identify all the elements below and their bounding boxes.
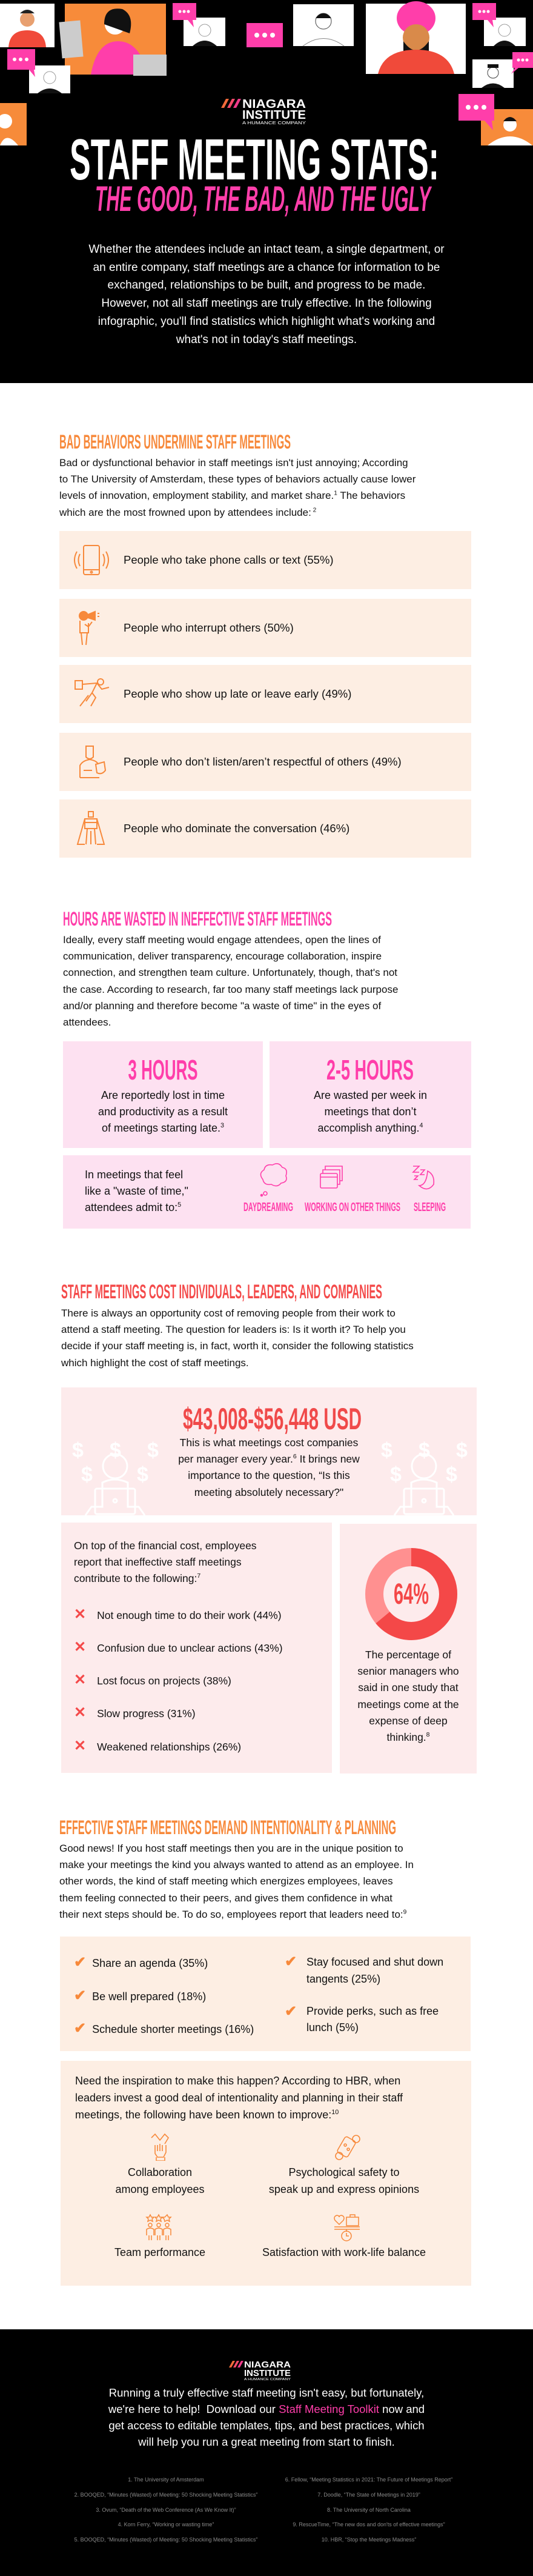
intro paragraph: Whether the attendees include an intact team, a single department, or [88, 243, 445, 256]
behavior: late: People who show up late or leave early (49%) [124, 687, 351, 700]
panel: leader actions checklist: ✔ [285, 1954, 297, 1970]
section 2 paragraph: connection, and strengthen team culture. Unfortunately, though, that's not [63, 967, 397, 978]
panel: improvements [61, 2061, 471, 2286]
panel: cost per manager: meeting absolutely necessary?" [194, 1486, 343, 1498]
call to action [108, 2386, 425, 2448]
call to action: get access to editable templates, tips, and best practices, which [108, 2419, 425, 2432]
references: 10. HBR, “Stop the Meetings Madness” [322, 2537, 416, 2543]
section 3 paragraph: attend a staff meeting. The question for leaders is: Is it worth it? To help you [61, 1324, 406, 1335]
section 2 paragraph [63, 934, 398, 1028]
stat: 2-5 hours: Are wasted per week in [314, 1089, 427, 1101]
stat: 2-5 hours: accomplish anything.4 [317, 1122, 423, 1134]
panel: 64% donut: 64% [394, 1578, 429, 1610]
section 4 paragraph: Good news! If you host staff meetings then you are in the unique position to [59, 1843, 403, 1854]
intro paragraph: infographic, you'll find statistics which highlight what's working and [98, 315, 435, 328]
stat: 3 hours: of meetings starting late.3 [102, 1122, 224, 1134]
icon: psychological safety [335, 2135, 360, 2160]
behavior: phone [59, 531, 471, 589]
panel: 64% donut: expense of deep [369, 1715, 448, 1727]
call to action: we're here to help! Download our Staff Meeting Toolkit now and [108, 2403, 425, 2415]
panel: cost per manager: per manager every year.6 It brings new [178, 1453, 360, 1465]
footer [0, 2329, 533, 2576]
section 1 paragraph: which are the most frowned upon by attendees include: 2 [59, 507, 316, 518]
references: 7. Doodle, “The State of Meetings in 2019” [317, 2492, 420, 2498]
section 3 paragraph: which highlight the cost of staff meetings. [61, 1357, 249, 1369]
panel: waste of time activities: attendees admit to:5 [85, 1201, 181, 1213]
panel: leader actions checklist: tangents (25%) [306, 1973, 380, 1985]
references: 4. Korn Ferry, “Working or wasting time” [118, 2521, 214, 2528]
list with x icons: ✕ Slow progress (31%) [74, 1704, 196, 1721]
panel: improvements: Psychological safety to [288, 2166, 400, 2178]
references: 8. The University of North Carolina [327, 2507, 411, 2513]
header background [0, 0, 533, 383]
list with x icons: ✕ Lost focus on projects (38%) [74, 1672, 231, 1688]
logo: Niagara Institute: INSTITUTE [242, 108, 306, 122]
panel: 64% donut: thinking.8 [386, 1731, 430, 1743]
panel: leader actions checklist: Provide perks, such as free [306, 2005, 439, 2017]
footer logo: INSTITUTE [244, 2368, 291, 2378]
panel: ineffective meeting effects: contribute to the following:7 [74, 1572, 200, 1584]
panel: improvements: Need the inspiration to make this happen? According to HBR, when [75, 2075, 400, 2087]
intro paragraph: exchanged, relationships to be built, and progress to be made. [108, 279, 425, 292]
behavior: interrupt: People who interrupt others (50%) [124, 621, 294, 634]
section 1 paragraph: to The University of Amsterdam, these types of behaviors actually cause lower [59, 473, 415, 485]
section 2 paragraph: and/or planning and therefore become "a waste of time" in the eyes of [63, 1000, 381, 1012]
behavior: not listening: People who don’t listen/aren’t respectful of others (49%) [124, 755, 402, 768]
section 2 paragraph: attendees. [63, 1016, 111, 1028]
decorative icons: people with laptops and dollar signs: $ [381, 1439, 392, 1462]
icon: collaboration [151, 2134, 169, 2161]
decorative icons: people with laptops and dollar signs: $ [147, 1439, 159, 1462]
behavior: phone: People who take phone calls or text (55%) [124, 553, 334, 566]
stat: 2-5 hours: meetings that don’t [324, 1106, 417, 1118]
section 1 paragraph [59, 457, 415, 518]
panel: 64% donut: The percentage of [365, 1649, 451, 1661]
intro paragraph: an entire company, staff meetings are a chance for information to be [93, 261, 440, 274]
logo: Niagara Institute: NIAGARA [242, 98, 306, 111]
call to action: Running a truly effective staff meeting isn't easy, but fortunately, [109, 2386, 424, 2399]
list with x icons: ✕ Weakened relationships (26%) [74, 1738, 241, 1754]
intro paragraph [88, 243, 445, 346]
call to action: will help you run a great meeting from start to finish. [138, 2435, 395, 2448]
panel: leader actions checklist: ✔ [285, 2003, 297, 2020]
section 3 paragraph: decide if your staff meeting is, in fact, worth it, consider the following statistics [61, 1340, 414, 1352]
section 1 paragraph: Bad or dysfunctional behavior in staff meetings isn't just annoying; According [59, 457, 408, 469]
intro paragraph: However, not all staff meetings are truly effective. In the following [101, 297, 432, 310]
references: 5. BOOQED, “Minutes (Wasted) of Meeting: 50 Shocking Meeting Statistics” [74, 2537, 257, 2543]
panel: leader actions checklist: lunch (5%) [306, 2021, 359, 2034]
behavior: dominate: People who dominate the conversation (46%) [124, 822, 349, 835]
section 4 paragraph: make your meetings the kind you always wanted to attend as an employee. In [59, 1859, 414, 1870]
behavior: late [59, 665, 471, 723]
panel: improvements: leaders invest a good deal of intentionality and planning in their staff [75, 2092, 403, 2104]
panel: improvements: Team performance [114, 2246, 205, 2258]
panel: cost per manager [61, 1387, 477, 1515]
section 4 paragraph: them feeling connected to their peers, and gives them confidence in what [59, 1892, 392, 1904]
decorative icons: people with laptops and dollar signs: $ [446, 1463, 457, 1486]
footer logo: A HUMANCE COMPANY [244, 2378, 291, 2381]
panel: waste of time activities [63, 1155, 471, 1229]
stat: 3 hours: and productivity as a result [98, 1106, 228, 1118]
header illustrations: video call tiles [0, 1, 533, 145]
panel: waste of time activities: like a "waste of time," [85, 1185, 188, 1197]
panel: waste of time activities: DAYDREAMING [243, 1201, 293, 1214]
panel: cost per manager: $43,008-$56,448 USD [183, 1402, 362, 1436]
panel: 64% donut [340, 1524, 477, 1774]
section 4 paragraph [59, 1843, 414, 1920]
panel: cost per manager: This is what meetings cost companies [180, 1436, 358, 1449]
stat: 3 hours [63, 1041, 263, 1148]
references: 1. The University of Amsterdam [128, 2477, 204, 2483]
panel: ineffective meeting effects: On top of the financial cost, employees [74, 1540, 257, 1552]
panel: waste of time activities: In meetings that feel [85, 1169, 183, 1181]
panel: leader actions checklist: ✔ Share an agenda (35%) [74, 1954, 208, 1970]
panel: improvements: Collaboration [128, 2166, 192, 2178]
logo: Niagara Institute: A HUMANCE COMPANY [242, 121, 306, 125]
panel: leader actions checklist: ✔ Schedule shorter meetings (16%) [74, 2020, 254, 2037]
panel: leader actions checklist: Stay focused and shut down [306, 1956, 443, 1968]
behavior: dominate [59, 799, 471, 858]
icon: team performance [145, 2214, 172, 2240]
references: 3. Ovum, “Death of the Web Conference (As We Know It)” [96, 2507, 236, 2513]
title [70, 127, 439, 219]
references: 2. BOOQED, “Minutes (Wasted) of Meeting: 50 Shocking Meeting Statistics” [74, 2492, 257, 2498]
panel: 64% donut: senior managers who [357, 1665, 459, 1677]
panel: improvements: speak up and express opinions [269, 2183, 419, 2195]
section 2 paragraph: Ideally, every staff meeting would engage attendees, open the lines of [63, 934, 381, 946]
decorative icons: people with laptops and dollar signs: $ [137, 1463, 148, 1486]
icon: work-life balance [334, 2214, 360, 2241]
decorative icons: people with laptops and dollar signs: $ [419, 1439, 430, 1462]
section 3 paragraph [61, 1307, 414, 1369]
behavior: interrupt [59, 599, 471, 657]
references [74, 2477, 452, 2543]
logo: Niagara Institute [221, 98, 306, 125]
references: 6. Fellow, “Meeting Statistics in 2021: The Future of Meetings Report” [285, 2477, 452, 2483]
decorative icons: people with laptops and dollar signs: $ [81, 1463, 93, 1486]
section 2 paragraph: communication, deliver transparency, encourage collaboration, inspire [63, 950, 382, 962]
panel: ineffective meeting effects: report that ineffective staff meetings [74, 1556, 242, 1568]
list with x icons [74, 1606, 283, 1754]
section 4 paragraph: other words, the kind of staff meeting which energizes employees, leaves [59, 1875, 393, 1887]
behavior: not listening [59, 733, 471, 791]
list with x icons: ✕ Not enough time to do their work (44%) [74, 1606, 282, 1623]
intro paragraph: what's not in today's staff meetings. [176, 333, 357, 346]
panel: cost per manager: importance to the question, “Is this [188, 1469, 350, 1481]
footer logo [229, 2360, 291, 2381]
decorative icons: people with laptops and dollar signs: $ [456, 1439, 468, 1462]
decorative icons: people with laptops and dollar signs: $ [110, 1439, 121, 1462]
decorative icons: people with laptops and dollar signs: $ [72, 1439, 84, 1462]
decorative icons: people with laptops and dollar signs [72, 1439, 468, 1515]
panel: improvements: Satisfaction with work-life balance [262, 2246, 426, 2258]
panel: improvements: meetings, the following have been known to improve:10 [75, 2109, 339, 2121]
panel: improvements: among employees [115, 2183, 205, 2195]
panel: ineffective meeting effects [61, 1523, 332, 1773]
section 3 paragraph: There is always an opportunity cost of removing people from their work to [61, 1307, 396, 1319]
list with x icons: ✕ Confusion due to unclear actions (43%) [74, 1639, 283, 1655]
panel: 64% donut: meetings come at the [357, 1698, 459, 1710]
section 2 paragraph: the case. According to research, far too many staff meetings lack purpose [63, 984, 398, 995]
stat: 2-5 hours [270, 1041, 471, 1148]
icons: daydreaming, working, sleeping [260, 1163, 435, 1196]
panel: leader actions checklist [60, 1937, 471, 2051]
section 1 paragraph: levels of innovation, employment stability, and market share.1 The behaviors [59, 490, 405, 501]
stat: 3 hours: Are reportedly lost in time [101, 1089, 225, 1101]
footer logo: NIAGARA [244, 2360, 291, 2370]
section 4 paragraph: their next steps should be. To do so, employees report that leaders need to:9 [59, 1909, 406, 1920]
panel: 64% donut: said in one study that [358, 1681, 459, 1693]
references: 9. RescueTime, “The new dos and don'ts of effective meetings” [293, 2521, 445, 2528]
decorative icons: people with laptops and dollar signs: $ [390, 1463, 402, 1486]
panel: leader actions checklist: ✔ Be well prepared (18%) [74, 1987, 206, 2004]
